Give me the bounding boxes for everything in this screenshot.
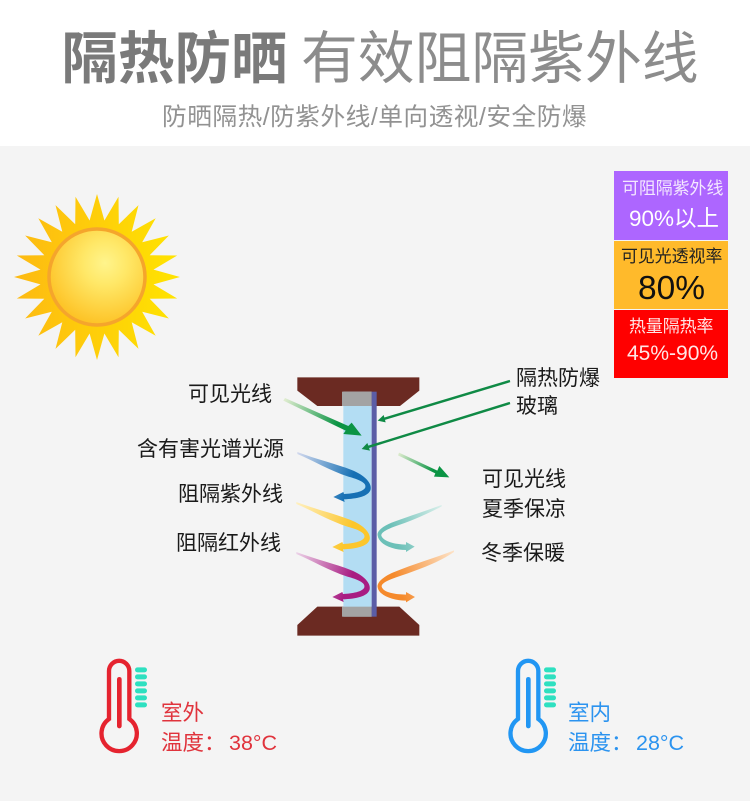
indoor temperature text: 温度： bbox=[568, 731, 633, 755]
stat panel: heat insulation: 45%-90% bbox=[627, 342, 718, 365]
right labels: 冬季保暖 bbox=[481, 542, 565, 565]
title bbox=[62, 27, 699, 91]
glass diagram with arrows bbox=[283, 377, 510, 636]
outdoor temperature text: 室外 bbox=[161, 701, 204, 725]
stat panel: UV blocking: 可阻隔紫外线 bbox=[622, 179, 723, 198]
arrow: UV reflected bbox=[297, 452, 371, 502]
left labels: 含有害光谱光源 bbox=[137, 438, 284, 461]
icon: indoor thermometer bbox=[510, 661, 556, 751]
stat panel: UV blocking: 90%以上 bbox=[629, 206, 719, 231]
subtitle: 防晒隔热/防紫外线/单向透视/安全防爆 bbox=[162, 103, 587, 131]
arrow: pointer to glass 2 bbox=[362, 402, 510, 451]
arrow: infrared ray bbox=[296, 552, 370, 602]
indoor temperature text bbox=[568, 701, 684, 755]
right labels: 夏季保凉 bbox=[482, 498, 566, 521]
arrow: pointer to glass bbox=[378, 380, 510, 422]
title: 隔热防晒 bbox=[62, 27, 288, 90]
indoor temperature text: 室内 bbox=[568, 701, 611, 725]
arrow: visible light out bbox=[398, 453, 449, 477]
outdoor temperature text bbox=[161, 701, 277, 755]
glass pane bbox=[342, 392, 377, 617]
right labels: 隔热防爆 bbox=[516, 367, 600, 390]
right labels: 可见光线 bbox=[482, 468, 566, 491]
arrow: yellow ray bbox=[296, 502, 370, 552]
left labels: 阻隔红外线 bbox=[176, 532, 281, 555]
window frame top bbox=[297, 377, 419, 406]
arrow: winter warm bbox=[378, 550, 454, 602]
left labels: 阻隔紫外线 bbox=[178, 483, 283, 506]
right labels: 玻璃 bbox=[516, 395, 558, 418]
stat panel: visible light transmittance bbox=[614, 241, 728, 309]
window frame bottom bbox=[297, 607, 419, 636]
arrow: visible light in bbox=[283, 398, 362, 436]
stat panel: heat insulation bbox=[614, 310, 728, 378]
stat panel: UV blocking bbox=[614, 171, 728, 240]
indoor temperature text: 28°C bbox=[636, 731, 684, 755]
outdoor temperature text: 温度： bbox=[161, 731, 226, 755]
icon: sun bbox=[14, 194, 180, 360]
right labels bbox=[481, 367, 600, 565]
outdoor temperature text: 38°C bbox=[229, 731, 277, 755]
stat panel: heat insulation: 热量隔热率 bbox=[629, 317, 714, 336]
arrow: summer cool bbox=[378, 505, 442, 552]
title: 有效阻隔紫外线 bbox=[301, 28, 699, 91]
left labels: 可见光线 bbox=[188, 383, 272, 406]
left labels bbox=[137, 383, 284, 555]
stat panel: visible light transmittance: 可见光透视率 bbox=[621, 247, 722, 266]
icon: outdoor thermometer bbox=[101, 661, 147, 751]
stat panel: visible light transmittance: 80% bbox=[638, 270, 705, 307]
